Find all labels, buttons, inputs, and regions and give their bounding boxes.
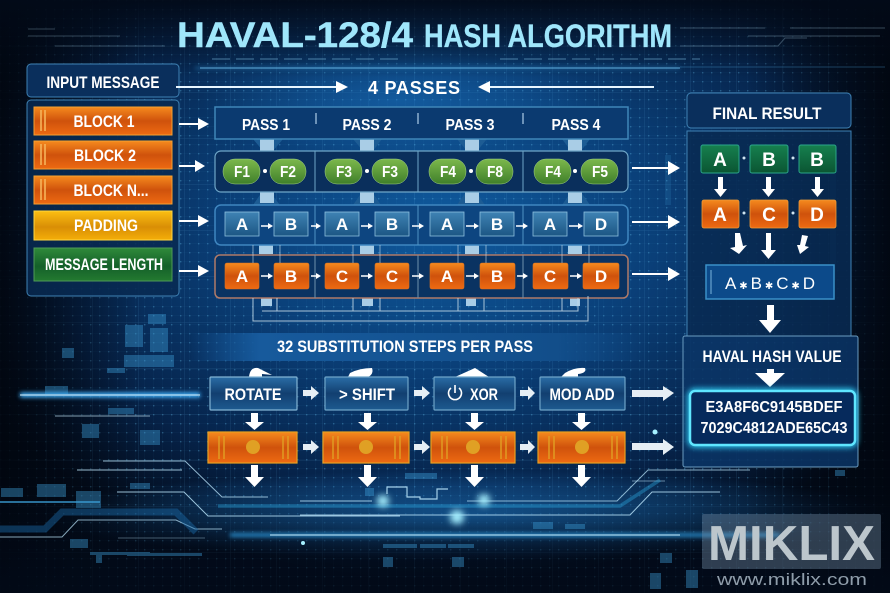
C: C — [544, 267, 556, 286]
feedback wiring — [253, 245, 589, 321]
A: A — [236, 215, 248, 234]
F3: F3 — [336, 164, 352, 181]
pass 3: PASS 3 — [446, 117, 495, 134]
heading: haval hash value: HAVAL HASH VALUE — [702, 347, 842, 366]
A: A — [236, 267, 248, 286]
block 1 — [34, 107, 172, 135]
F1: F1 — [234, 164, 250, 181]
panel: input message — [27, 64, 179, 296]
hash value box — [690, 391, 855, 445]
arrows: step down — [245, 413, 591, 487]
step: rotate — [210, 377, 297, 410]
B: B — [810, 150, 824, 171]
pass 4: PASS 4 — [552, 117, 601, 134]
heading: input message: INPUT MESSAGE — [46, 74, 160, 92]
step: shift — [325, 377, 408, 410]
B: B — [762, 150, 776, 171]
heading: final result — [687, 93, 851, 128]
message length: MESSAGE LENGTH — [45, 255, 163, 274]
F4: F4 — [440, 164, 456, 181]
hash value box: E3A8F6C9145BDEF — [706, 399, 843, 416]
A: A — [713, 205, 727, 226]
F8: F8 — [487, 164, 503, 181]
F5: F5 — [592, 164, 608, 181]
watermark: miklix: MIKLIX — [708, 517, 875, 571]
arrows: passes to final result — [632, 161, 680, 281]
title: HASH ALGORITHM — [424, 18, 672, 54]
heading: final result: FINAL RESULT — [712, 104, 822, 123]
step: xor — [434, 377, 515, 410]
block 2: BLOCK 2 — [74, 146, 136, 165]
panel: final result — [687, 93, 851, 336]
watermark: miklix — [702, 514, 881, 589]
step: shift: > SHIFT — [339, 385, 396, 404]
panel: orange register row — [215, 255, 628, 298]
panel: pass headers — [215, 107, 628, 139]
title: HAVAL-128/4 — [177, 16, 414, 55]
connectors between rows — [253, 139, 590, 306]
step: xor: XOR — [470, 385, 498, 404]
arrow: right to 4 passes — [478, 81, 654, 93]
step: mod add: MOD ADD — [550, 385, 614, 404]
watermark: miklix: www.miklix.com — [716, 570, 867, 589]
B: B — [285, 267, 297, 286]
panel: boolean functions row — [215, 151, 628, 192]
A: A — [441, 215, 453, 234]
D: D — [595, 215, 607, 234]
A: A — [336, 215, 348, 234]
heading: input message — [27, 64, 179, 97]
arrow: input message to 4 passes — [176, 81, 348, 93]
message length — [34, 248, 172, 281]
arrows: step flow — [303, 386, 674, 455]
C: C — [336, 267, 348, 286]
B: B — [386, 215, 398, 234]
heading: 4 passes: 4 PASSES — [368, 78, 460, 98]
block n — [34, 176, 172, 204]
block 1: BLOCK 1 — [74, 112, 134, 131]
C: C — [762, 205, 776, 226]
padding — [34, 211, 172, 240]
icon: power — [448, 385, 462, 400]
combined registers box — [706, 265, 834, 299]
D: D — [810, 205, 824, 226]
arrow: to hash value — [759, 305, 781, 333]
padding: PADDING — [74, 216, 138, 235]
B: B — [285, 215, 297, 234]
band: 32 substitution steps — [190, 333, 650, 361]
A: A — [544, 215, 556, 234]
D: D — [595, 267, 607, 286]
pass 1: PASS 1 — [242, 117, 290, 134]
arrows: blocks to passes — [179, 118, 209, 277]
step: mod add — [540, 377, 625, 410]
C: C — [386, 267, 398, 286]
loop markers above steps — [249, 368, 585, 377]
title — [177, 16, 672, 55]
combined registers box: A ✱B ✱C ✱D — [725, 274, 815, 293]
block n: BLOCK N... — [74, 181, 148, 200]
block 2 — [34, 141, 172, 169]
F2: F2 — [280, 164, 296, 181]
F3 second: F3 — [382, 164, 398, 181]
F4 second: F4 — [545, 164, 561, 181]
B: B — [491, 215, 503, 234]
pass 2: PASS 2 — [342, 117, 392, 134]
B: B — [491, 267, 503, 286]
orange processing blocks — [208, 432, 625, 463]
arrow: to hash box — [755, 369, 785, 387]
hash value box: 7029C4812ADE65C43 — [700, 420, 848, 437]
A: A — [713, 150, 727, 171]
arrows: final result cells — [714, 177, 824, 259]
panel: blue register row — [215, 205, 628, 245]
band: 32 substitution steps: 32 SUBSTITUTION STEPS PER PASS — [277, 337, 533, 356]
panel: haval hash value — [683, 336, 858, 467]
A: A — [441, 267, 453, 286]
step: rotate: ROTATE — [224, 385, 282, 404]
